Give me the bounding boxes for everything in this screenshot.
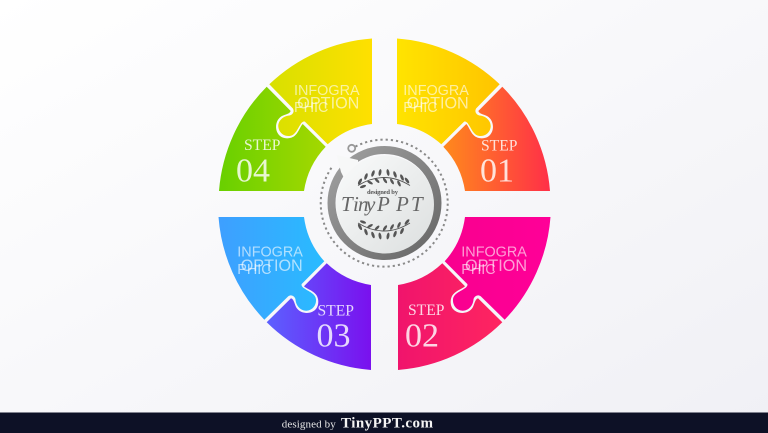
puzzle piece: orange — [443, 87, 550, 191]
footer bar — [0, 412, 768, 433]
text: step 04 label: STEP — [244, 137, 281, 154]
text: step 01 info: PHIC — [403, 100, 438, 116]
text: step 03 info — [237, 245, 303, 278]
lower wreath — [357, 218, 410, 240]
speech disk — [336, 156, 434, 254]
text: step 02 info: PHIC — [461, 262, 496, 278]
text: step 04 info: PHIC — [294, 100, 328, 116]
text: step 01 label — [480, 138, 518, 190]
footer credit brand: TinyPPT.com — [341, 416, 434, 432]
text: step 04 label: 04 — [236, 153, 270, 190]
text: step 02 info: OPTION — [465, 257, 527, 275]
puzzle piece: magenta — [445, 217, 550, 320]
ring marker — [348, 145, 355, 152]
puzzle piece: yellow — [397, 38, 500, 144]
text: step 02 label: 02 — [405, 318, 439, 355]
puzzle piece: blue — [218, 217, 324, 320]
text: step 03 info: OPTION — [241, 257, 303, 275]
panel: step 01 quadrant — [397, 38, 550, 191]
text: step 01 label: STEP — [481, 138, 518, 155]
grey ring — [332, 150, 438, 256]
panel: step 04 quadrant — [219, 38, 372, 191]
speech pointer — [337, 155, 358, 180]
text: step 04 info — [294, 83, 360, 116]
puzzle piece: green — [219, 87, 326, 191]
TinyPPT script logo: TinyPPT — [341, 192, 424, 216]
text: step 01 info: INFOGRA — [403, 83, 469, 99]
text: step 02 info: INFOGRA — [461, 245, 527, 261]
puzzle piece: yellow-green — [269, 38, 372, 144]
text: step 04 label — [236, 137, 281, 190]
designed by label: designed by — [367, 189, 399, 196]
text: step 01 info — [403, 83, 469, 116]
text: step 02 label — [405, 302, 445, 355]
footer credit small: designed by — [282, 418, 336, 430]
panel: step 02 quadrant — [398, 217, 550, 370]
text: step 02 info — [461, 245, 527, 278]
text: step 03 label: 03 — [316, 318, 350, 355]
text: step 01 info: OPTION — [407, 94, 469, 112]
text: step 03 label: STEP — [318, 303, 354, 320]
dotted ring — [321, 140, 448, 267]
puzzle piece: crimson — [398, 263, 502, 370]
puzzle piece: purple — [267, 263, 371, 370]
text: step 04 info: OPTION — [297, 94, 359, 112]
text: step 03 label — [316, 303, 354, 355]
text: step 02 label: STEP — [408, 302, 445, 319]
text: step 01 label: 01 — [480, 153, 514, 190]
text: step 03 info: INFOGRA — [237, 245, 303, 261]
upper wreath — [357, 169, 410, 189]
centre badge — [321, 140, 448, 267]
text: step 04 info: INFOGRA — [294, 83, 360, 99]
text: step 03 info: PHIC — [237, 262, 272, 278]
panel: step 03 quadrant — [218, 217, 371, 370]
